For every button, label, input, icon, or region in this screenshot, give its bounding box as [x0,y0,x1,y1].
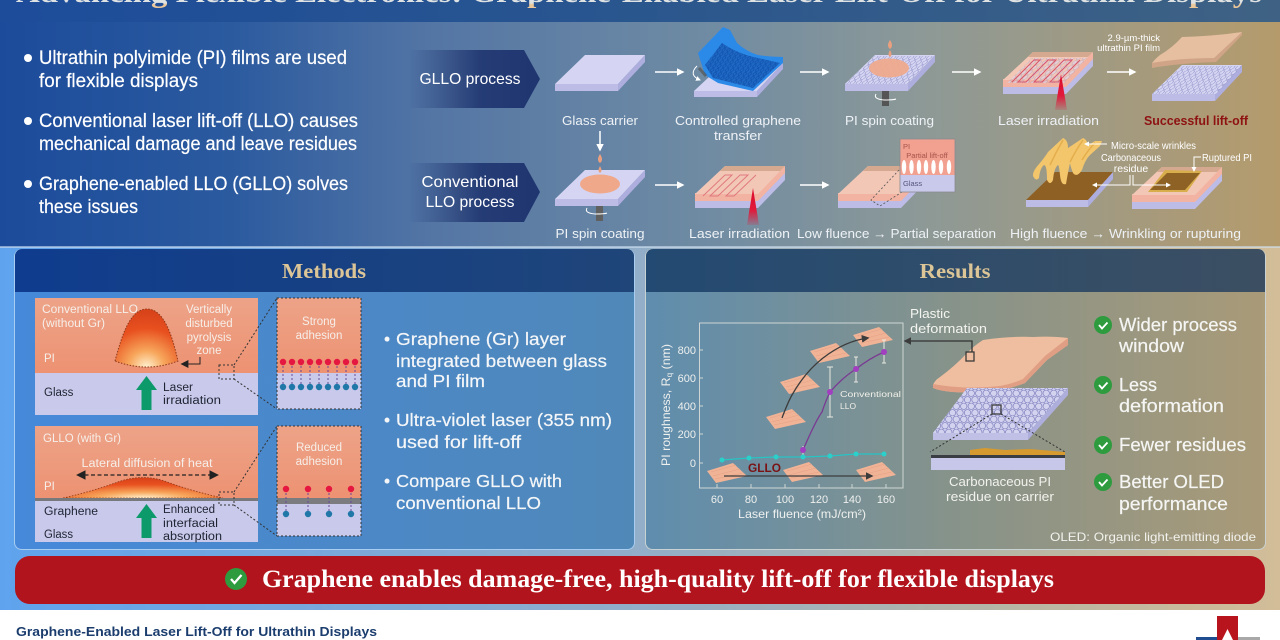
results header [646,249,1265,292]
methods bullets: used for lift-off [396,432,521,452]
y axis labels [678,345,696,470]
diagram: GLLO cross-section: Enhanced [163,504,215,516]
illustration: lifted PI film and carrier: Carbonaceous PI [949,474,1051,489]
diagram: conventional LLO cross-section: Laser [163,382,193,394]
step: controlled graphene transfer: transfer [714,128,763,143]
icon: green laser arrow [136,504,157,538]
step: high fluence wrinkling: Carbonaceous [1101,152,1161,164]
overview bullets: these issues [39,197,138,218]
inset: partial lift-off: Glass [903,179,922,188]
y axis labels: 400 [678,401,696,413]
methods header: Methods [282,259,366,283]
results header: Results [920,259,990,283]
GLLO process chevron [408,50,540,108]
conclusion banner [15,556,1265,604]
x axis labels: 160 [877,494,895,506]
diagram: GLLO cross-section: PI [44,481,55,493]
chart: roughness vs laser fluence: Conventional [840,389,901,399]
step: high fluence wrinkling [1026,138,1196,207]
diagram: conventional LLO cross-section: disturbed [185,318,233,330]
diagram: conventional LLO cross-section: pyrolysis [187,332,232,344]
methods bullets: Graphene (Gr) layer [396,329,566,349]
Conventional LLO process chevron: Conventional [422,174,518,191]
GLLO process chevron: GLLO process [420,71,520,88]
arrow [800,71,828,73]
check item: less deformation: Less [1119,375,1157,395]
inset: partial lift-off [900,139,955,192]
x axis labels: 100 [776,494,794,506]
chart: roughness vs laser fluence: (nm) [659,344,673,373]
step: high fluence wrinkling: Micro-scale wrinkles [1111,140,1196,152]
panel: overview section background [0,22,1280,247]
chart: roughness vs laser fluence: Laser fluence (mJ/cm²) [738,507,866,521]
step: high fluence wrinkling: residue [1114,163,1148,175]
check item: better OLED performance: performance [1119,494,1228,514]
diagram: GLLO cross-section: Glass [44,529,73,541]
methods bullets [384,329,612,513]
step: successful lift-off: Successful lift-off [1144,113,1249,128]
step: successful lift-off: ultrathin PI film [1097,43,1160,54]
panel: methods [14,249,634,550]
inset: strong adhesion: adhesion [296,330,342,342]
diagram: conventional LLO cross-section: PI [44,353,55,365]
step: glass carrier: Glass carrier [562,113,639,128]
diagram: conventional LLO cross-section: Conventional LLO [42,304,138,316]
step: successful lift-off [1097,32,1249,128]
check item: less deformation: deformation [1119,396,1224,416]
inset: partial lift-off: PI [903,142,910,151]
illustration: lifted PI film and carrier: Plastic [910,306,951,321]
overview bullets [24,48,358,218]
x axis labels: 80 [745,494,757,506]
icon: green laser arrow [136,376,157,410]
methods bullets: • [384,410,390,430]
step: laser irradiation: Laser irradiation [998,113,1099,128]
x axis labels: 140 [843,494,861,506]
diagram: GLLO cross-section: Graphene [44,506,98,518]
inset: reduced adhesion: adhesion [296,456,342,468]
check item: better OLED performance: Better OLED [1119,472,1224,492]
chart: roughness vs laser fluence [659,323,903,521]
x axis labels [711,494,895,506]
overview bullets: Ultrathin polyimide (PI) films are used [39,48,347,69]
footnote: OLED: Organic light-emitting diode [1050,530,1256,544]
arrow [655,71,683,73]
illustration: lifted PI film and carrier: residue on carrier [946,489,1055,504]
methods bullets: conventional LLO [396,493,541,513]
diagram: conventional LLO cross-section: (without Gr) [42,318,105,330]
inset: strong adhesion: Strong [302,316,336,328]
step: glass carrier [555,55,645,128]
methods header [15,249,634,292]
illustration: lifted PI film and carrier [905,306,1068,504]
overview bullets: Graphene-enabled LLO (GLLO) solves [39,174,348,195]
y axis labels: 200 [678,429,696,441]
step: controlled graphene transfer: Controlled graphene [675,113,801,128]
check item: better OLED performance [1094,472,1228,514]
conventional LLO series [803,352,884,450]
diagram: GLLO cross-section: Lateral diffusion of heat [82,458,213,470]
step: low fluence partial separation [797,139,996,241]
chart: roughness vs laser fluence: GLLO [748,463,781,475]
chart: roughness vs laser fluence: q [665,373,674,377]
arrow: glass carrier to conventional [599,131,601,150]
inset: reduced adhesion [277,426,361,536]
diagram: conventional LLO cross-section: Glass [44,387,74,399]
y axis labels: 0 [690,458,696,470]
inset: strong adhesion [277,298,361,409]
step: high fluence rupturing: High fluence → Wrinkling or rupturing [1010,226,1241,241]
arrow [800,184,828,186]
step: PI spin coating on graphene [845,40,935,128]
conclusion banner: Graphene enables damage-free, high-quality lift-off for flexible displays [262,566,1054,593]
GLLO arrow [724,475,872,477]
overview bullets: for flexible displays [39,71,198,92]
methods bullets: and PI film [396,371,485,391]
methods bullets: Compare GLLO with [396,471,562,491]
inset: partial lift-off: Partial lift-off [906,151,949,160]
check item: less deformation [1094,375,1224,416]
step: laser irradiation [998,52,1099,128]
diagram: conventional LLO cross-section: Vertically [186,304,232,316]
diagram: conventional LLO cross-section: zone [197,345,221,357]
check item: wider process window [1094,315,1237,356]
step: high fluence rupturing [1010,152,1252,241]
Conventional LLO process chevron: LLO process [426,194,514,211]
diagram: conventional LLO cross-section: irradiation [163,395,221,407]
x axis labels: 120 [810,494,828,506]
error bars [803,340,886,455]
highlight line between sections [0,246,1280,248]
y axis labels: 800 [678,345,696,357]
check item: wider process window: Wider process [1119,315,1237,335]
footer white strip [0,610,1280,640]
step: successful lift-off: 2.9-µm-thick [1108,33,1160,44]
chart: roughness vs laser fluence: LLO [840,401,856,411]
overview bullets: Conventional laser lift-off (LLO) causes [39,111,358,132]
curved trend arrow [782,338,868,418]
step: conventional PI spin coating: PI spin coating [556,226,644,241]
step: conventional laser irradiation [689,166,790,241]
y axis labels: 600 [678,373,696,385]
check item: fewer residues: Fewer residues [1119,435,1246,455]
methods bullets: • [384,329,390,349]
diagram: GLLO cross-section [35,426,277,543]
title band [0,0,1280,22]
methods bullets: integrated between glass [396,351,607,371]
logo [1196,616,1260,640]
GLLO series [722,454,884,460]
step: conventional PI spin coating [555,154,645,241]
panel: results [646,249,1266,550]
chart: roughness vs laser fluence: PI roughness, R [659,380,673,466]
methods bullets: • [384,471,390,491]
check item: wider process window: window [1118,336,1185,356]
footer caption: Graphene-Enabled Laser Lift-Off for Ultrathin Displays [16,625,377,639]
step: PI spin coating on graphene: PI spin coating [845,113,934,128]
x axis labels: 60 [711,494,723,506]
step: high fluence rupturing: Ruptured PI [1202,152,1252,164]
step: conventional laser irradiation: Laser irradiation [689,226,790,241]
results list [1094,315,1246,514]
step: controlled graphene transfer [675,27,801,143]
overview bullets: mechanical damage and leave residues [39,134,357,155]
illustration: lifted PI film and carrier: deformation [910,321,987,336]
methods bullets: Ultra-violet laser (355 nm) [396,410,612,430]
step: low fluence partial separation: Low fluence → Partial separation [797,226,996,241]
panel: lower section background [0,247,1280,610]
arrow [952,71,980,73]
diagram: GLLO cross-section: GLLO (with Gr) [43,433,121,445]
icon: check [225,568,247,590]
arrow [655,184,683,186]
arrow [1107,71,1135,73]
diagram: conventional LLO cross-section [35,298,277,415]
inset: reduced adhesion: Reduced [296,442,342,454]
diagram: GLLO cross-section: absorption [163,531,222,543]
diagram: GLLO cross-section: interfacial [163,518,218,530]
Conventional LLO process chevron [408,163,540,222]
sheets on chart [707,327,896,483]
